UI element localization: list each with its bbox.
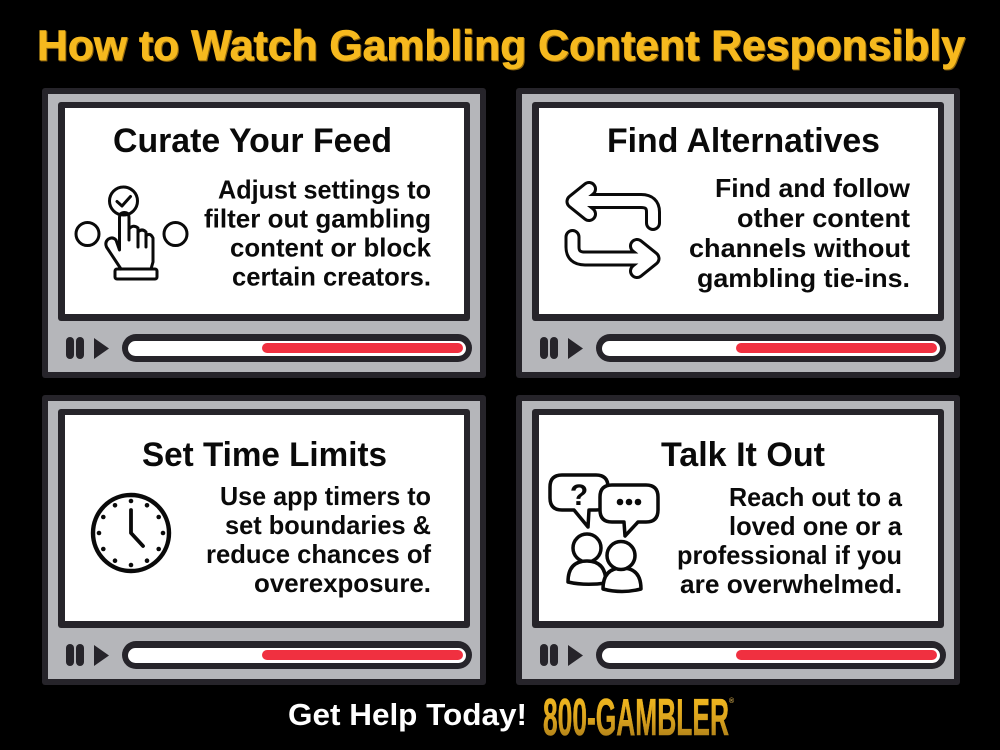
video player frame [516, 395, 960, 685]
body text: gambling tie-ins. [697, 263, 910, 293]
player controls [540, 641, 946, 669]
player controls [66, 334, 472, 362]
logo: 800-GAMBLER: ® [729, 697, 735, 705]
body text: are overwhelmed. [680, 569, 902, 599]
video player frame [42, 395, 486, 685]
body text: reduce chances of [206, 539, 431, 569]
title: How to Watch Gambling Content Responsibly [37, 22, 965, 70]
body text: set boundaries & [225, 510, 431, 540]
video player frame [516, 88, 960, 378]
body text: Adjust settings to [218, 174, 431, 204]
icon: swap arrows [572, 189, 653, 271]
heading: Set Time Limits [142, 436, 387, 474]
player controls [66, 641, 472, 669]
body text: content or block [230, 232, 432, 262]
body text: filter out gambling [204, 204, 431, 234]
body text: professional if you [677, 540, 902, 570]
icon: clock [93, 495, 169, 571]
heading: Find Alternatives [607, 122, 880, 160]
panel: talk it out [516, 395, 960, 685]
body text [677, 482, 903, 599]
icon: two people talking: ? [570, 479, 588, 512]
video player frame [42, 88, 486, 378]
icon: hand selecting option [76, 187, 187, 279]
body text: Find and follow [715, 173, 911, 203]
body text [689, 173, 911, 293]
panel: find alternatives [516, 88, 960, 378]
panel: curate your feed [42, 88, 486, 378]
player controls [540, 334, 946, 362]
body text: Use app timers to [220, 481, 431, 511]
body text: certain creators. [232, 262, 431, 292]
body text: loved one or a [729, 511, 903, 541]
body text [206, 481, 431, 598]
body text: channels without [689, 233, 910, 263]
panel: set time limits [42, 395, 486, 685]
icon: two people talking [550, 475, 658, 592]
body text [204, 174, 432, 292]
body text: Reach out to a [729, 482, 903, 512]
logo: 800-GAMBLER: 800-GAMBLER [543, 689, 729, 747]
logo: 800-GAMBLER [543, 689, 735, 747]
heading: Curate Your Feed [113, 122, 392, 160]
body text: overexposure. [254, 568, 431, 598]
body text: other content [737, 203, 910, 233]
heading: Talk It Out [661, 436, 825, 474]
footer call to action: Get Help Today! [288, 697, 527, 732]
